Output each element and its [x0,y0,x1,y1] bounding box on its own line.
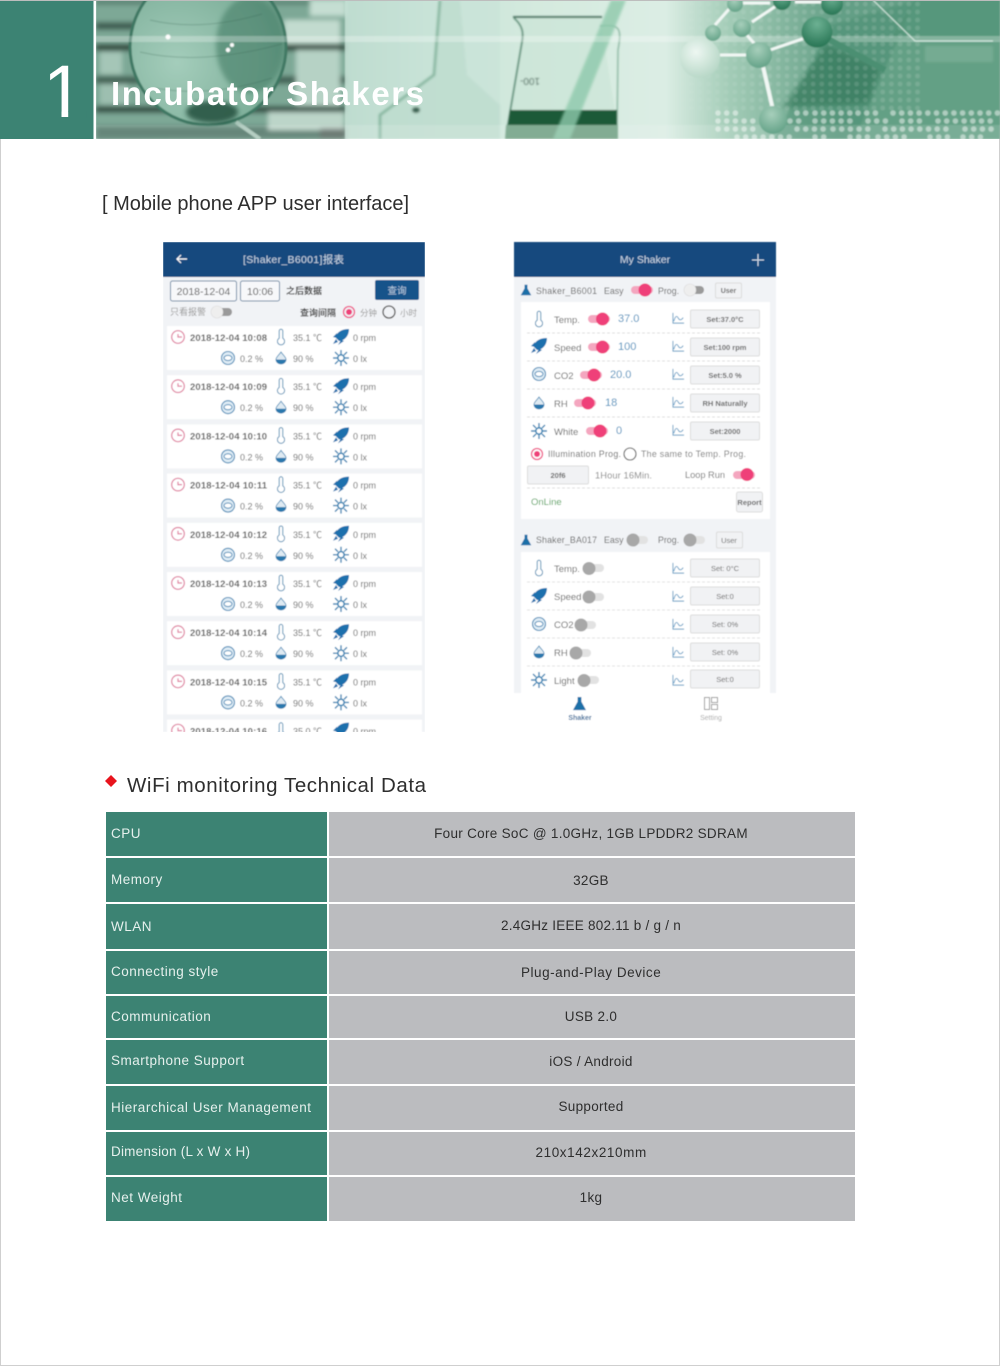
CO2 row: CO2 [554,371,574,382]
record 10:12 [167,523,422,567]
row: Dimension: 210x142x210mm [536,1145,646,1160]
record 10:13: 0.2 % [240,600,263,610]
record 10:11 [167,474,422,518]
speed row [531,338,760,356]
record 10:08: 0 rpm [353,333,376,343]
row: Communication: Communication [111,1009,211,1024]
white light row: Set:2000 [710,427,740,436]
speed row: Speed [554,343,581,354]
illumination program row [532,448,746,460]
chapter number block: 1 [43,50,84,133]
tab bar [514,693,776,727]
shaker B6001 title row: Easy [604,286,624,296]
record 10:14: 0 rpm [353,628,376,638]
panel: my shaker phone [514,242,776,727]
online status and report: OnLine [531,497,562,508]
illumination program row: The same to Temp. Prog. [641,449,746,459]
panel: report screen phone [163,242,425,764]
record 10:14 [167,621,422,665]
white light row [531,422,760,440]
loop run row: Loop Run [685,470,725,480]
shaker B6001 title row [521,283,742,298]
RH row: 18 [605,397,617,409]
RH row off: Set: 0% [712,648,738,657]
record 10:14: 0.2 % [240,649,263,659]
row: Connecting style: Connecting style [111,964,219,979]
record 10:16 cut off: 35.0 ℃ [293,727,322,737]
molecule [680,0,885,134]
row: Connecting style [106,951,855,994]
beaker: 100- [520,75,540,86]
report header bar: [Shaker_B6001]报表 [243,253,344,266]
record 10:16 cut off [167,720,422,732]
tab: shaker [568,697,592,722]
white light row: 0 [616,425,622,437]
banner title: Incubator Shakers [111,75,424,112]
record 10:14: 0 lx [353,649,368,659]
icon: red diamond bullet [105,775,117,787]
temperature row [535,310,760,328]
record 10:09: 2018-12-04 10:09 [190,382,267,393]
record 10:14: 2018-12-04 10:14 [190,628,268,639]
record 10:10: 0 rpm [353,431,376,441]
my shaker header bar [514,242,776,277]
record 10:15: 35.1 ℃ [293,677,322,687]
row: Net Weight [106,1177,855,1221]
record 10:12: 0 rpm [353,530,376,540]
row: CPU [106,812,855,856]
CO2 row off [532,615,760,633]
row: Net Weight: 1kg [580,1190,602,1205]
record 10:15: 0.2 % [240,698,263,708]
record 10:11: 35.1 ℃ [293,481,322,491]
online status and report: Report [737,498,762,507]
record 10:08: 0.2 % [240,354,263,364]
row: Smartphone Support: iOS / Android [549,1054,633,1069]
record 10:11: 0.2 % [240,502,263,512]
record 10:08 [167,326,422,370]
shaker B6001 title row: Prog. [658,286,679,296]
record 10:16 cut off: 2018-12-04 10:16 [190,727,267,738]
query controls: 只看报警 [170,306,206,317]
record 10:15: 0 lx [353,698,368,708]
record 10:09 [167,375,422,419]
CO2 row: 20.0 [610,369,631,381]
temperature row: Temp. [554,315,580,326]
record 10:12: 0 lx [353,551,368,561]
temperature row off: Set: 0°C [711,564,740,573]
row: Connecting style: Plug-and-Play Device [521,965,661,980]
record 10:10: 0.2 % [240,452,263,462]
record 10:11: 0 lx [353,502,368,512]
record 10:14: 90 % [293,649,314,659]
beaker [505,0,626,139]
record 10:08: 35.1 ℃ [293,333,322,343]
CO2 row off: CO2 [554,620,574,631]
technical data table [106,812,855,1221]
record 10:13: 0 lx [353,600,368,610]
halftone and wedges [775,0,1000,139]
tab: setting [700,698,722,722]
query controls [170,280,419,318]
speed row: 100 [618,341,636,353]
row: Hierarchical User Management [106,1086,855,1130]
record 10:12: 2018-12-04 10:12 [190,530,267,541]
query controls: 查询 [387,285,407,297]
shaker B6001 card [521,302,770,519]
record 10:13: 35.1 ℃ [293,579,322,589]
shaker BA017 title row [521,532,742,548]
record 10:09: 90 % [293,403,314,413]
query controls: 查询间隔 [300,307,336,318]
temperature row off: Temp. [554,564,580,575]
temperature row: 37.0 [618,313,639,325]
speed row off [531,587,760,605]
query controls: 10:06 [247,286,273,298]
light row off: Light [554,676,575,687]
row: WLAN [106,904,855,949]
row: Memory: 32GB [573,873,609,888]
row: Memory: Memory [111,872,163,887]
record 10:13 [167,572,422,616]
loop run row: 20f6 [550,471,566,480]
speed row: Set:100 rpm [704,343,747,352]
banner photo collage [96,0,1000,139]
row: Hierarchical User Management: Hierarchical User Management [111,1100,311,1115]
record 10:09: 0 lx [353,403,368,413]
row: Dimension [106,1132,855,1175]
record 10:13: 90 % [293,600,314,610]
record 10:10: 2018-12-04 10:10 [190,431,267,442]
tab: shaker: Shaker [568,715,592,722]
record 10:14: 35.1 ℃ [293,628,322,638]
row: Memory [106,858,855,902]
heading: wifi technical data: WiFi monitoring Technical Data [127,774,427,797]
query controls: 分钟 [360,308,377,318]
heading: mobile app interface: [ Mobile phone APP user interface] [102,193,409,215]
temperature row off [535,559,760,577]
record 10:15 [167,670,422,714]
chapter number block [0,0,94,139]
row: CPU: CPU [111,826,141,841]
row: Smartphone Support: Smartphone Support [111,1053,245,1068]
temperature row: Set:37.0°C [706,315,744,324]
query controls: 小时 [400,308,418,318]
shaker BA017 title row: Easy [604,535,624,545]
record 10:10: 35.1 ℃ [293,431,322,441]
record 10:12: 35.1 ℃ [293,530,322,540]
speed row off: Set:0 [716,592,734,601]
record 10:15: 2018-12-04 10:15 [190,677,268,688]
row: Dimension: Dimension (L x W x H) [111,1144,250,1159]
illumination program row: Illumination Prog. [548,449,621,459]
light row off [531,670,760,688]
record 10:16 cut off: 0 rpm [353,727,376,737]
loop run row: 1Hour 16Min. [595,470,652,480]
light row off: Set:0 [716,675,734,684]
speed row off: Speed [554,592,581,603]
record 10:13: 2018-12-04 10:13 [190,579,267,590]
query controls: 2018-12-04 [177,286,231,298]
record 10:13: 0 rpm [353,579,376,589]
RH row off [534,643,760,661]
RH row [534,394,760,412]
record 10:09: 35.1 ℃ [293,382,322,392]
row: WLAN: WLAN [111,919,152,934]
record 10:11: 90 % [293,502,314,512]
shaker B6001 title row: User [721,288,737,295]
row: WLAN: 2.4GHz IEEE 802.11 b / g / n [501,918,681,933]
loop run row [528,466,755,484]
record 10:15: 0 rpm [353,677,376,687]
CO2 row: Set:5.0 % [708,371,742,380]
record 10:10 [167,424,422,468]
flask [380,0,500,139]
record 10:08: 90 % [293,354,314,364]
record 10:11: 2018-12-04 10:11 [190,481,268,492]
RH row: RH [554,399,568,410]
RH row off: RH [554,648,568,659]
CO2 row [532,366,760,384]
tab: setting: Setting [700,715,722,722]
record 10:08: 2018-12-04 10:08 [190,333,267,344]
row: Communication [106,996,855,1038]
shaker BA017 title row: Prog. [658,535,679,545]
row: CPU: Four Core SoC @ 1.0GHz, 1GB LPDDR2 SDRAM [434,826,748,841]
online status and report [531,492,762,512]
RH row: RH Naturally [702,399,748,408]
report header bar [163,242,425,277]
shaker B6001 title row: Shaker_B6001 [536,286,597,296]
record 10:09: 0.2 % [240,403,263,413]
row: Net Weight: Net Weight [111,1190,183,1205]
header banner [0,0,1000,139]
row: Hierarchical User Management: Supported [558,1099,624,1114]
shaker BA017 card [521,552,770,693]
shaker BA017 title row: User [721,536,737,545]
record 10:12: 0.2 % [240,551,263,561]
my shaker header bar: My Shaker [620,254,671,266]
row: Smartphone Support [106,1040,855,1084]
record 10:10: 90 % [293,452,314,462]
row: Communication: USB 2.0 [565,1009,617,1024]
record 10:08: 0 lx [353,354,368,364]
globe [130,0,286,139]
record 10:15: 90 % [293,698,314,708]
record 10:11: 0 rpm [353,481,376,491]
CO2 row off: Set: 0% [712,620,738,629]
record 10:09: 0 rpm [353,382,376,392]
shaker BA017 title row: Shaker_BA017 [536,535,597,545]
record 10:12: 90 % [293,551,314,561]
query controls: 之后数据 [286,285,322,296]
white light row: White [554,427,578,438]
record 10:10: 0 lx [353,452,368,462]
